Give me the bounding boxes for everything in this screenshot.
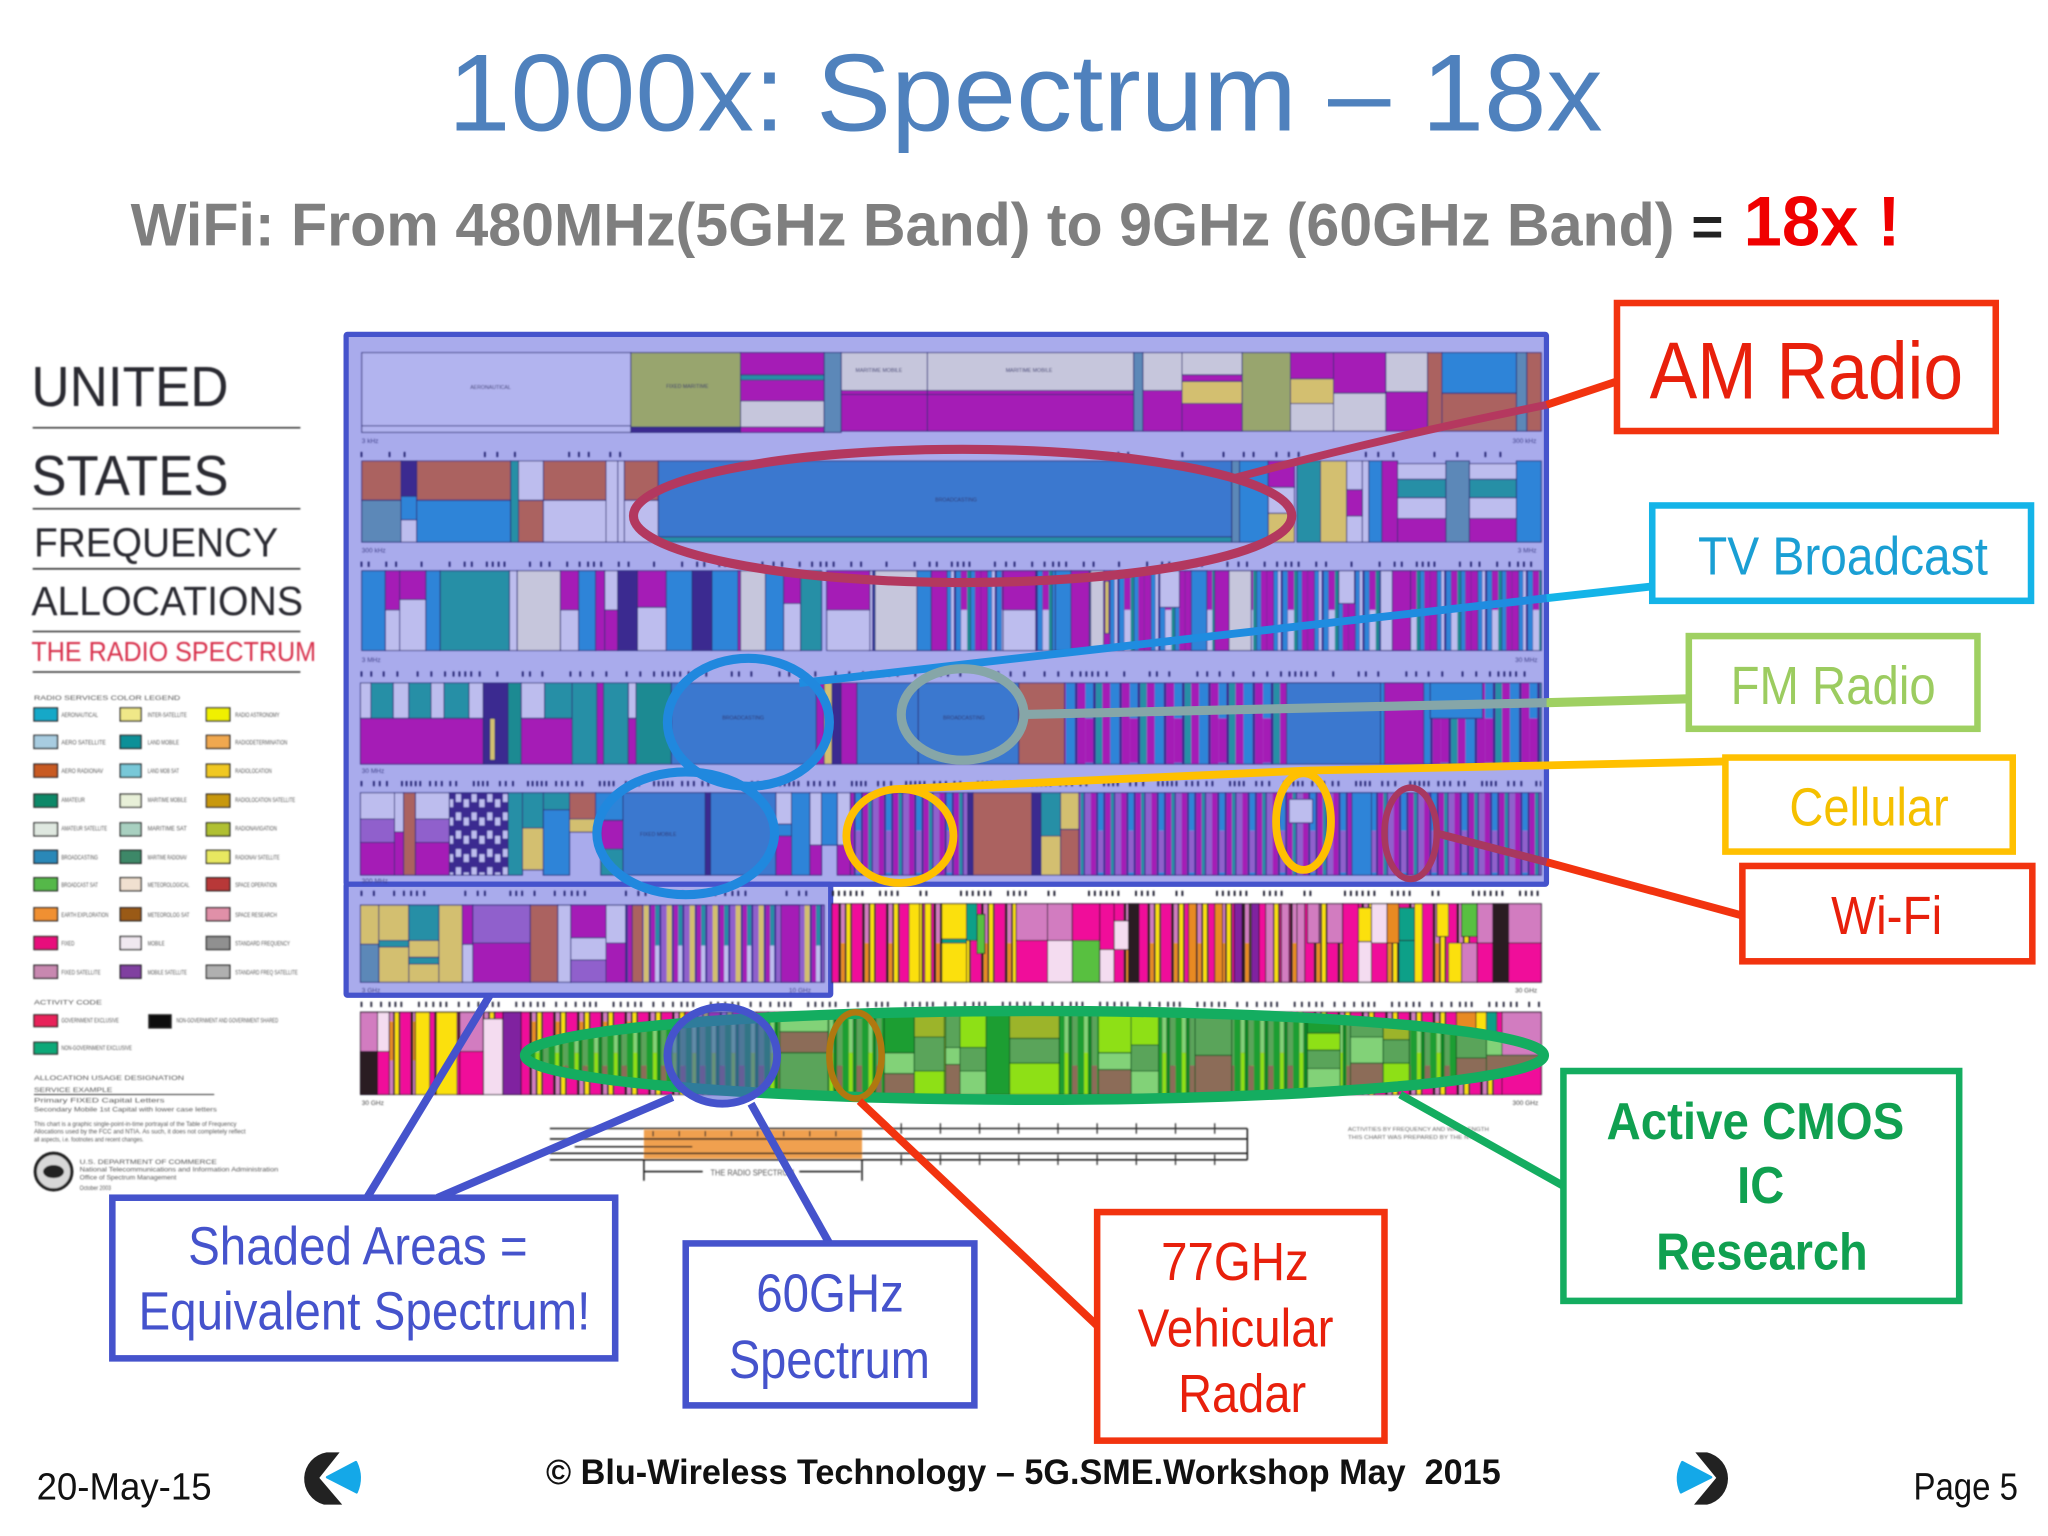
callout: 60GHz Spectrum: Spectrum bbox=[729, 1331, 930, 1390]
footer date: 20-May-15 bbox=[37, 1466, 212, 1508]
band row 5: 300 MHz to 3 GHz, cellular and Wi-Fi: FIXED MOBILE bbox=[640, 832, 677, 838]
callout: FM Radio bbox=[1689, 636, 1977, 729]
activity code legend: ACTIVITY CODE bbox=[34, 999, 103, 1006]
leader: Cellular bbox=[901, 761, 1725, 789]
band chart: all rows bbox=[360, 353, 1541, 1181]
callout: Shaded Areas = Equivalent Spectrum: Equivalent Spectrum! bbox=[138, 1283, 590, 1342]
callout: 60GHz Spectrum bbox=[686, 1243, 974, 1405]
radio services colour legend: STANDARD FREQUENCY bbox=[235, 941, 290, 948]
band row 3: 3 MHz to 30 MHz bbox=[362, 571, 1541, 650]
tick marks above bands bbox=[360, 455, 1541, 1004]
band range captions: 3 MHz bbox=[362, 657, 381, 664]
allocation usage designation: Primary FIXED Capital Letters bbox=[34, 1097, 166, 1104]
subtitle: = bbox=[1691, 196, 1723, 258]
ellipse: 77GHz radar band bbox=[829, 1012, 882, 1098]
band range captions: 30 GHz bbox=[362, 1100, 384, 1107]
callout: Active CMOS IC Research bbox=[1563, 1071, 1959, 1301]
activity code legend: GOVERNMENT EXCLUSIVE bbox=[61, 1018, 119, 1025]
subtitle: WiFi: From 480MHz(5GHz Band) to 9GHz (60GHz Band) bbox=[131, 192, 1674, 259]
band range captions: 30 GHz bbox=[1515, 988, 1537, 995]
chart heading: United States Frequency Allocations: UNITED bbox=[31, 355, 229, 418]
icon: next arrow bbox=[1678, 1452, 1728, 1505]
allocation usage designation: ALLOCATION USAGE DESIGNATION bbox=[34, 1075, 185, 1082]
radio services colour legend: MOBILE bbox=[148, 941, 165, 948]
radio spectrum wave scale: THE RADIO SPECTRUM bbox=[711, 1168, 794, 1178]
chart heading: United States Frequency Allocations: STATES bbox=[31, 444, 229, 507]
issuer text: National Telecommunications and Information Administration bbox=[80, 1167, 279, 1174]
band range captions: 300 GHz bbox=[1512, 1100, 1538, 1107]
callout: TV Broadcast bbox=[1652, 505, 2031, 601]
radio services colour legend: AERONAUTICAL bbox=[61, 712, 98, 719]
radio services colour legend: BROADCASTING bbox=[61, 854, 98, 861]
issuer text: Office of Spectrum Management bbox=[80, 1174, 177, 1181]
activity code legend: NON-GOVERNMENT EXCLUSIVE bbox=[61, 1045, 132, 1052]
callout: Active CMOS IC Research: Active CMOS bbox=[1607, 1093, 1904, 1151]
callout: FM Radio: FM Radio bbox=[1731, 657, 1936, 716]
callout: 77GHz Vehicular Radar: Vehicular bbox=[1138, 1300, 1334, 1359]
radio services colour legend: RADIO SERVICES COLOR LEGEND bbox=[34, 695, 181, 702]
radio services colour legend: RADIO ASTRONOMY bbox=[235, 712, 280, 719]
callout: Wi-Fi bbox=[1742, 866, 2032, 961]
callout: Shaded Areas = Equivalent Spectrum: Shaded Areas = bbox=[188, 1217, 528, 1276]
leader: 77GHz Vehicular Radar bbox=[859, 1101, 1097, 1326]
issuer text bbox=[80, 1159, 279, 1192]
icon: previous arrow bbox=[304, 1452, 360, 1505]
radio services colour legend: SPACE OPERATION bbox=[235, 882, 277, 889]
ellipse: 60GHz band bbox=[667, 1007, 777, 1104]
radio services colour legend: AERO RADIONAV bbox=[61, 768, 104, 775]
footer copyright: © Blu-Wireless Technology – 5G.SME.Workshop May 2015 bbox=[546, 1453, 1501, 1492]
allocation usage designation bbox=[34, 1075, 246, 1144]
radio spectrum wave scale: THIS CHART WAS PREPARED BY THE NTIA bbox=[1348, 1135, 1479, 1141]
chart heading: United States Frequency Allocations: ALLOCATIONS bbox=[31, 578, 303, 624]
footer page number: Page 5 bbox=[1913, 1466, 2018, 1508]
radio services colour legend: AERO SATELLITE bbox=[61, 739, 106, 746]
leader: AM Radio bbox=[1234, 381, 1617, 478]
callout: Active CMOS IC Research: IC bbox=[1737, 1157, 1784, 1215]
band range captions: 3 kHz bbox=[362, 438, 378, 445]
activity code legend: NON-GOVERNMENT AND GOVERNMENT SHARED bbox=[176, 1018, 278, 1025]
radio services colour legend: AMATEUR SATELLITE bbox=[61, 826, 108, 833]
callout: 60GHz Spectrum: 60GHz bbox=[756, 1264, 904, 1323]
icon: department of commerce seal bbox=[35, 1153, 72, 1190]
radio spectrum wave scale: ACTIVITIES BY FREQUENCY AND WAVELENGTH bbox=[1348, 1127, 1489, 1133]
chart heading: United States Frequency Allocations: THE RADIO SPECTRUM bbox=[31, 636, 316, 667]
band row 1: 3 kHz to 300 kHz: MARITIME MOBILE bbox=[856, 368, 903, 374]
radio services colour legend: MARITIME SAT bbox=[148, 826, 187, 833]
band range captions: 300 MHz bbox=[362, 878, 388, 885]
panel: chart title and legend bbox=[31, 355, 316, 1192]
band row 4: 30 MHz to 300 MHz, TV and FM broadcast bbox=[360, 683, 1541, 764]
allocation usage designation: This chart is a graphic single-point-in-time portrayal of the Table of Frequency bbox=[34, 1121, 237, 1128]
radio services colour legend: MOBILE SATELLITE bbox=[148, 969, 187, 976]
band range captions: 300 kHz bbox=[362, 547, 386, 554]
ellipse: FM Radio band bbox=[901, 669, 1024, 760]
band range captions: 30 MHz bbox=[1515, 657, 1538, 664]
leaders: blue shaded and 60GHz lines bbox=[367, 995, 829, 1243]
radio services colour legend: RADIODETERMINATION bbox=[235, 739, 288, 746]
callout: Cellular bbox=[1725, 758, 2013, 852]
issuer text: October 2003 bbox=[80, 1185, 111, 1192]
callout: Wi-Fi: Wi-Fi bbox=[1831, 887, 1942, 946]
ellipse: Active CMOS region bbox=[525, 1011, 1544, 1100]
radio services colour legend: MARITIME RADIONAV bbox=[148, 854, 187, 861]
band row 1: 3 kHz to 300 kHz bbox=[362, 353, 1541, 432]
allocation usage designation: Allocations used by the FCC and NTIA. As such, it does not completely reflect bbox=[34, 1129, 246, 1136]
band row 6: unshaded part, 10 GHz to 30 GHz bbox=[832, 904, 1541, 982]
band row 1: 3 kHz to 300 kHz: MARITIME MOBILE bbox=[1006, 368, 1053, 374]
panel: shaded lower spectrum frame bbox=[346, 884, 831, 995]
leader: FM Radio bbox=[1025, 699, 1689, 714]
band row 7: 30 GHz to 300 GHz bbox=[360, 1012, 1541, 1095]
band row 6: shaded part, 3 GHz to 10 GHz bbox=[360, 905, 824, 982]
radio services colour legend: FIXED bbox=[61, 941, 75, 948]
panel: shaded upper spectrum frame bbox=[346, 334, 1546, 884]
callout: 77GHz Vehicular Radar bbox=[1097, 1212, 1384, 1441]
radio services colour legend: RADIOLOCATION SATELLITE bbox=[235, 797, 296, 804]
chart heading: United States Frequency Allocations: FREQUENCY bbox=[34, 519, 278, 565]
band range captions: 10 GHz bbox=[789, 988, 811, 995]
band row 2: 300 kHz to 3 MHz, AM broadcast: BROADCASTING bbox=[935, 498, 977, 504]
ellipse: Wi-Fi band bbox=[1384, 788, 1437, 879]
callout: AM Radio: AM Radio bbox=[1650, 326, 1963, 416]
band row 4: 30 MHz to 300 MHz, TV and FM broadcast: BROADCASTING bbox=[943, 716, 985, 722]
leader: Active CMOS bbox=[1400, 1095, 1563, 1186]
radio services colour legend: LAND MOB SAT bbox=[148, 768, 179, 775]
radio services colour legend: INTER-SATELLITE bbox=[148, 712, 187, 719]
radio services colour legend: METEOROLOGICAL bbox=[148, 882, 190, 889]
allocation usage designation: SERVICE EXAMPLE bbox=[34, 1087, 113, 1094]
band range captions bbox=[362, 438, 1538, 1107]
band row 1: 3 kHz to 300 kHz: FIXED MARITIME bbox=[666, 384, 709, 390]
band row 1: 3 kHz to 300 kHz: AERONAUTICAL bbox=[470, 385, 511, 391]
band range captions: 300 kHz bbox=[1512, 438, 1536, 445]
band row 2: 300 kHz to 3 MHz, AM broadcast bbox=[362, 461, 1541, 542]
radio services colour legend: RADIONAVIGATION bbox=[235, 826, 277, 833]
ellipses: Cellular bands bbox=[846, 773, 1331, 883]
allocation usage designation: all aspects, i.e. footnotes and recent changes. bbox=[34, 1137, 144, 1144]
title: 1000x: Spectrum – 18x bbox=[448, 33, 1603, 155]
band range captions: 3 GHz bbox=[362, 988, 380, 995]
callout: Cellular: Cellular bbox=[1789, 778, 1949, 837]
radio spectrum wave scale bbox=[550, 1123, 1489, 1181]
leader: Wi-Fi bbox=[1437, 833, 1742, 916]
ellipses: TV Broadcast bands bbox=[597, 658, 829, 895]
ellipse: AM Radio band bbox=[633, 449, 1292, 583]
chart heading: United States Frequency Allocations bbox=[31, 355, 316, 672]
callout: AM Radio bbox=[1617, 303, 1996, 431]
radio services colour legend: RADIONAV SATELLITE bbox=[235, 854, 280, 861]
radio services colour legend: METEOROLOG SAT bbox=[148, 912, 189, 919]
radio services colour legend: AMATEUR bbox=[61, 797, 85, 804]
activity code legend bbox=[34, 999, 278, 1054]
band row 7: green CMOS research region bbox=[521, 1014, 1541, 1095]
radio services colour legend: RADIOLOCATION bbox=[235, 768, 272, 775]
radio services colour legend: SPACE RESEARCH bbox=[235, 912, 277, 919]
radio services colour legend bbox=[34, 695, 298, 978]
radio services colour legend: FIXED SATELLITE bbox=[61, 969, 101, 976]
band row 4: 30 MHz to 300 MHz, TV and FM broadcast: BROADCASTING bbox=[722, 716, 764, 722]
band row 5: 300 MHz to 3 GHz, cellular and Wi-Fi bbox=[360, 793, 1541, 875]
band range captions: 30 MHz bbox=[362, 768, 384, 775]
callout: 77GHz Vehicular Radar: 77GHz bbox=[1161, 1233, 1309, 1292]
allocation usage designation: Secondary Mobile 1st Capital with lower case letters bbox=[34, 1107, 218, 1114]
callout: Active CMOS IC Research: Research bbox=[1656, 1224, 1868, 1282]
leader: TV Broadcast bbox=[799, 586, 1652, 683]
radio services colour legend: BROADCAST SAT bbox=[61, 882, 98, 889]
callout: 77GHz Vehicular Radar: Radar bbox=[1178, 1365, 1306, 1424]
radio services colour legend: LAND MOBILE bbox=[148, 739, 179, 746]
radio services colour legend: EARTH EXPLORATION bbox=[61, 912, 109, 919]
callout: TV Broadcast: TV Broadcast bbox=[1698, 528, 1988, 587]
band range captions: 3 MHz bbox=[1518, 547, 1537, 554]
radio services colour legend: MARITIME MOBILE bbox=[148, 797, 187, 804]
callout: Shaded Areas = Equivalent Spectrum bbox=[112, 1198, 615, 1358]
radio services colour legend: STANDARD FREQ SATELLITE bbox=[235, 969, 298, 976]
subtitle: 18x ! bbox=[1744, 182, 1900, 261]
issuer text: U.S. DEPARTMENT OF COMMERCE bbox=[80, 1159, 218, 1166]
